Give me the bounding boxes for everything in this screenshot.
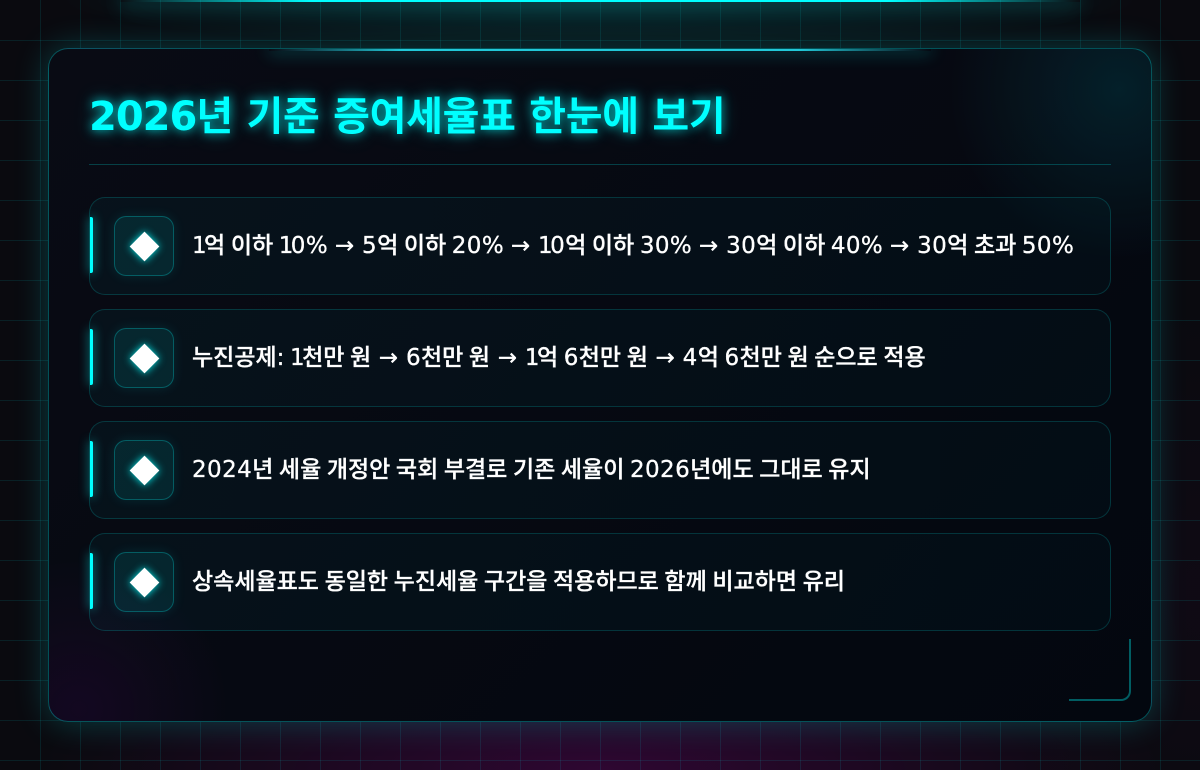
accent bar	[90, 217, 93, 273]
top neon bar	[120, 0, 1080, 2]
icon: diamond	[114, 440, 174, 500]
icon: diamond	[114, 552, 174, 612]
item 4: inheritance tax comparison	[89, 533, 1111, 631]
item 3: 2024 amendment	[89, 421, 1111, 519]
icon: diamond	[114, 216, 174, 276]
corner bracket	[1069, 639, 1131, 701]
text: 2024년 세율 개정안 국회 부결로 기존 세율이 2026년에도 그대로 유지	[192, 457, 871, 483]
title divider	[89, 164, 1111, 165]
text: 누진공제: 1천만 원 → 6천만 원 → 1억 6천만 원 → 4억 6천만 원 순으로 적용	[192, 345, 926, 371]
text: 1억 이하 10% → 5억 이하 20% → 10억 이하 30% → 30억 이하 40% → 30억 초과 50%	[192, 233, 1073, 259]
text: 상속세율표도 동일한 누진세율 구간을 적용하므로 함께 비교하면 유리	[192, 569, 845, 595]
accent bar	[90, 329, 93, 385]
item 1: tax brackets	[89, 197, 1111, 295]
item 2: progressive deduction	[89, 309, 1111, 407]
icon: diamond	[114, 328, 174, 388]
panel top accent	[269, 49, 931, 51]
accent bar	[90, 441, 93, 497]
accent bar	[90, 553, 93, 609]
title: 2026년 기준 증여세율표 한눈에 보기	[89, 94, 725, 140]
